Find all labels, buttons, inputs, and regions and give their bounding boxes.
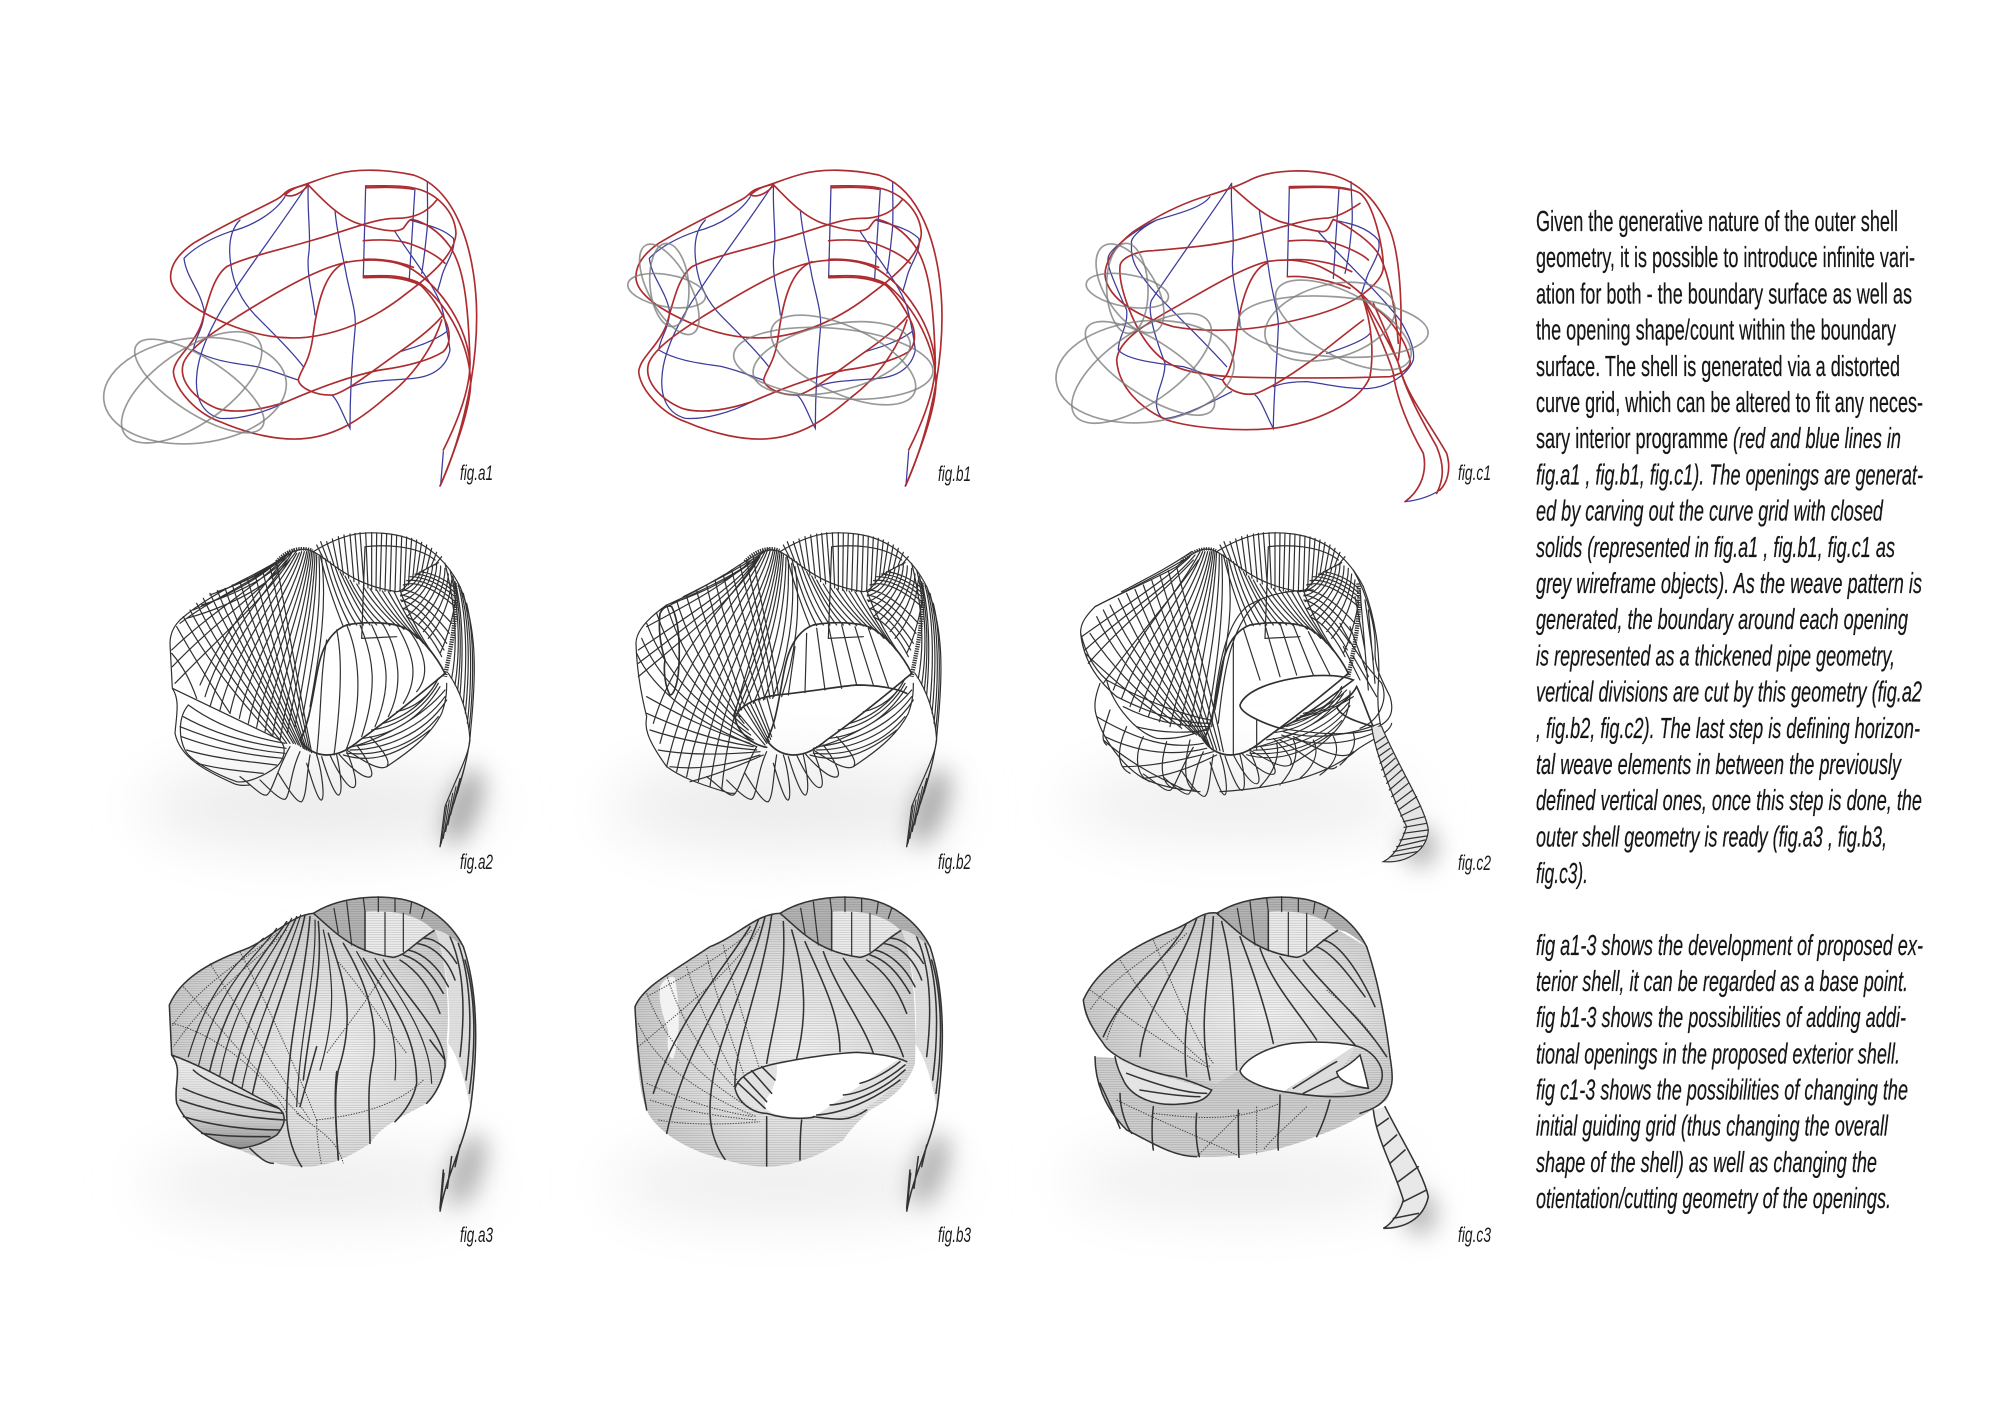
figure b2 with ground shadow bbox=[610, 533, 958, 850]
shadow a2 bbox=[143, 763, 491, 850]
figure a3: finished woven shell bbox=[143, 897, 494, 1220]
openings and rims c3 bbox=[1240, 1042, 1392, 1113]
text block: process description bbox=[1536, 206, 1923, 890]
opening ribs a2 bbox=[317, 625, 425, 755]
label fig.b1: fig.b1 bbox=[938, 463, 971, 486]
opening ribs b2 bbox=[788, 625, 888, 695]
figure c1: altered guiding grid with reshaped tail bbox=[1051, 171, 1449, 502]
cut lens a3 bbox=[172, 1055, 284, 1148]
opening ribs and lens c2 bbox=[1240, 675, 1353, 728]
text block: process description: fig.c3). bbox=[1536, 858, 1588, 890]
figure c2 with ground shadow bbox=[1067, 533, 1437, 867]
shadow b3 bbox=[610, 1129, 957, 1220]
lens cut b2 bbox=[735, 685, 907, 747]
left weave b2 bbox=[636, 548, 907, 793]
shadow a3 bbox=[143, 1129, 494, 1220]
white openings c3 bbox=[1240, 1042, 1355, 1092]
shell body a3 bbox=[169, 897, 476, 1212]
text block: process description: sary interior programme (red and blue lines in bbox=[1536, 423, 1901, 455]
grey wireframe solids c1 bbox=[1051, 233, 1430, 444]
grey wireframe solids a1 bbox=[98, 310, 292, 464]
grey wireframe solids b1 bbox=[625, 235, 936, 423]
left weave a2 bbox=[170, 549, 313, 785]
scalloped ring c2 bbox=[1103, 710, 1392, 792]
figure a2 with ground shadow bbox=[143, 533, 491, 850]
slit opening b2 bbox=[659, 606, 679, 695]
tail c2 bbox=[1372, 727, 1428, 862]
figure b1: curve grid with added opening solids bbox=[625, 170, 942, 486]
figure a1: red and blue curve grid with grey wireframe solids bbox=[98, 170, 477, 486]
figure b3: shell with added openings bbox=[610, 897, 957, 1220]
label fig.a1: fig.a1 bbox=[460, 462, 493, 485]
lower body c3 bbox=[1095, 1057, 1391, 1157]
label fig.c2: fig.c2 bbox=[1458, 852, 1491, 875]
red lines c1 bbox=[1362, 295, 1449, 502]
shadow b2 bbox=[610, 763, 958, 850]
outer rim c2 bbox=[1280, 570, 1392, 734]
blue lines c1 bbox=[1108, 182, 1440, 502]
shadow c3 bbox=[1067, 1147, 1437, 1235]
shadow c2 bbox=[1067, 767, 1437, 867]
ribs c3 bbox=[1103, 915, 1390, 1080]
opening and lens b3 bbox=[735, 1052, 907, 1118]
slit opening b3 bbox=[660, 977, 679, 1058]
lower lens c3 bbox=[1115, 1057, 1212, 1104]
figure c3: shell with changed grid and opening orientation bbox=[1067, 897, 1437, 1235]
label fig.b2: fig.b2 bbox=[938, 851, 971, 874]
label fig.a3: fig.a3 bbox=[460, 1224, 493, 1247]
label fig.b3: fig.b3 bbox=[938, 1224, 971, 1247]
upper body c3 bbox=[1083, 913, 1392, 1093]
label fig.c1: fig.c1 bbox=[1458, 462, 1491, 485]
tail c3 bbox=[1373, 1107, 1428, 1228]
text block: figure series explanation bbox=[1536, 930, 1923, 1215]
label fig.a2: fig.a2 bbox=[460, 851, 493, 874]
label fig.c3: fig.c3 bbox=[1458, 1224, 1491, 1247]
shell body b3 bbox=[635, 897, 942, 1212]
left weave c2 bbox=[1081, 549, 1217, 792]
